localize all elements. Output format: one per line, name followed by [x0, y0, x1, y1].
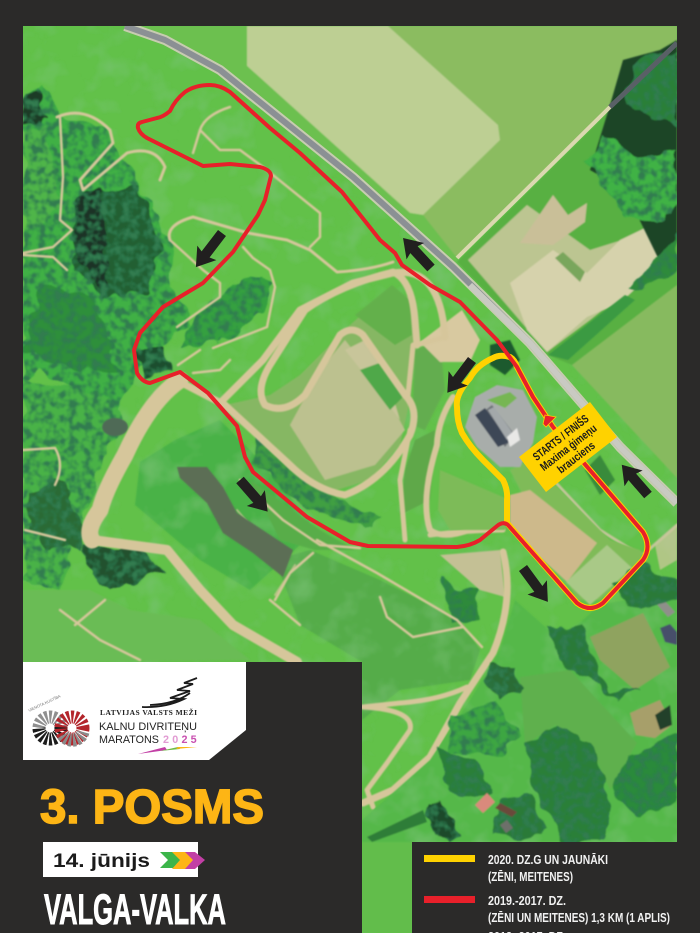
panel: bottom left title panel — [0, 662, 362, 933]
arrow: east start section — [622, 464, 652, 498]
panel: legend — [412, 842, 700, 933]
arrow: near the building — [447, 357, 476, 393]
arrow: beside pond — [236, 476, 268, 512]
map: central motocross clearing — [225, 285, 505, 597]
map: parking lot and lawn — [438, 340, 648, 605]
arrow: west section — [196, 230, 226, 268]
legend: yellow route swatch — [424, 855, 475, 862]
legend: yellow route text — [488, 852, 608, 884]
icon: chevrons — [160, 852, 205, 869]
route: yellow course — [457, 356, 648, 608]
map: north-west forest — [23, 85, 273, 420]
map: top right forest — [548, 40, 677, 360]
start and finish sign: brauciens — [556, 440, 598, 476]
route: start arrow marker — [543, 415, 556, 427]
route: red course — [134, 85, 648, 608]
map: south-west woods and shrubs — [23, 380, 480, 720]
logo panel — [23, 662, 246, 760]
logo: event name line one: KALNU DIVRITEŅU — [99, 721, 197, 733]
map: main road and side road — [125, 26, 677, 503]
logo: colour stripe — [138, 747, 197, 754]
logo: tree swoosh — [142, 678, 197, 707]
legend: red route text — [488, 893, 670, 925]
map: dirt tracks — [23, 107, 677, 807]
logo: black sunburst wheel: VIENOTA KUSTĪBA — [27, 693, 62, 713]
heading: stage number: 3. POSMS — [40, 781, 264, 834]
start and finish sign: Maxima ģimeņu — [538, 422, 599, 474]
legend: yellow route text: 2020. DZ.G UN JAUNĀKI — [488, 852, 608, 867]
map: south east woods, garden and houses — [362, 525, 677, 933]
logo: sponsor name: LATVIJAS VALSTS MEŽI — [100, 707, 197, 717]
legend: red route swatch — [424, 896, 475, 903]
date badge — [43, 842, 205, 877]
legend: yellow route text: (ZĒNI, MEITENES) — [488, 869, 573, 884]
date text: 14. jūnijs — [53, 850, 150, 872]
arrow: south section — [519, 565, 548, 602]
logo: red sunburst wheel — [61, 717, 83, 740]
heading: location: VALGA-VALKA — [44, 886, 226, 933]
start and finish sign — [519, 402, 617, 492]
start and finish sign: STARTS / FINIŠS — [530, 412, 592, 464]
map: pond — [177, 467, 293, 577]
direction arrows — [186, 226, 657, 609]
logo: event name line two: MARATONS — [99, 734, 159, 746]
map: agricultural fields — [130, 26, 677, 478]
arrow: along the road — [403, 238, 435, 272]
logo: year: 2025 — [163, 734, 200, 746]
legend: red route text: 2019.-2017. DZ. — [488, 893, 566, 908]
logo: black sunburst wheel — [27, 693, 62, 739]
